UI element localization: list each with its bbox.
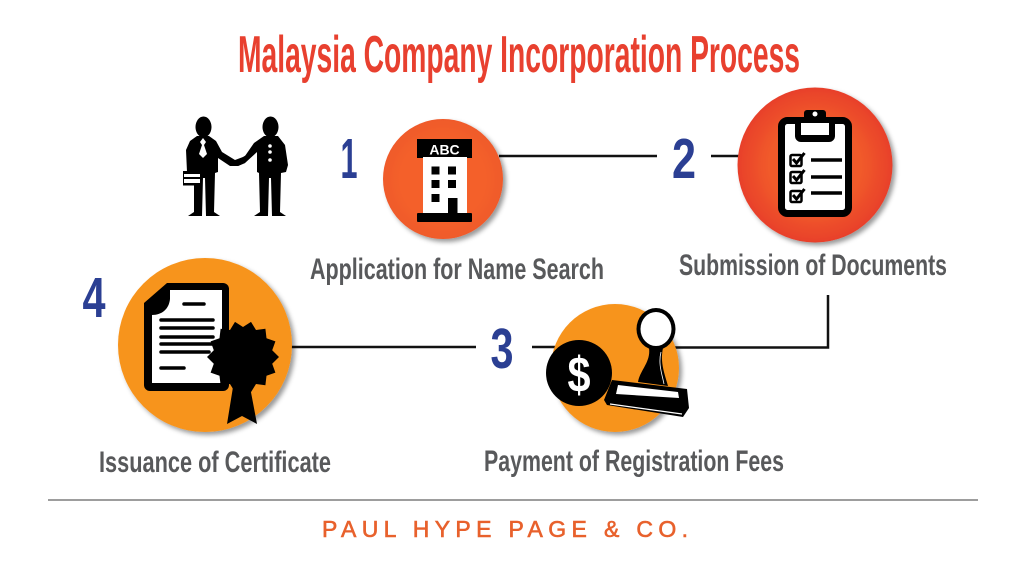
step 3 number: 3 bbox=[490, 317, 514, 381]
icon: dollar coin bbox=[546, 340, 612, 406]
step 4 label: Issuance of Certificate bbox=[99, 446, 331, 479]
footer divider bbox=[48, 499, 978, 501]
footer brand: PAUL HYPE PAGE & CO. bbox=[322, 516, 688, 542]
step 1 label: Application for Name Search bbox=[310, 253, 604, 286]
step 3 label: Payment of Registration Fees bbox=[484, 445, 784, 478]
step 1 badge: building icon: ABC bbox=[429, 142, 460, 158]
connector: step 1 to step 2 bbox=[499, 155, 740, 157]
step 2 badge: clipboard icon bbox=[738, 88, 892, 242]
connector: step 3 to step 4 bbox=[288, 346, 556, 348]
step 1 number: 1 bbox=[340, 127, 358, 191]
step 4 number: 4 bbox=[82, 266, 106, 330]
icon: two businessmen shaking hands bbox=[183, 116, 288, 216]
step 4 badge: certificate icon bbox=[118, 258, 292, 432]
step 1 badge: building icon bbox=[383, 119, 503, 239]
icon: dollar coin: $ bbox=[568, 347, 591, 403]
step 3 badge: payment and stamp icons bbox=[546, 304, 689, 432]
step 2 number: 2 bbox=[672, 127, 696, 191]
connector: step 2 to step 3 bbox=[670, 295, 828, 348]
icon: rubber stamp bbox=[604, 308, 689, 417]
